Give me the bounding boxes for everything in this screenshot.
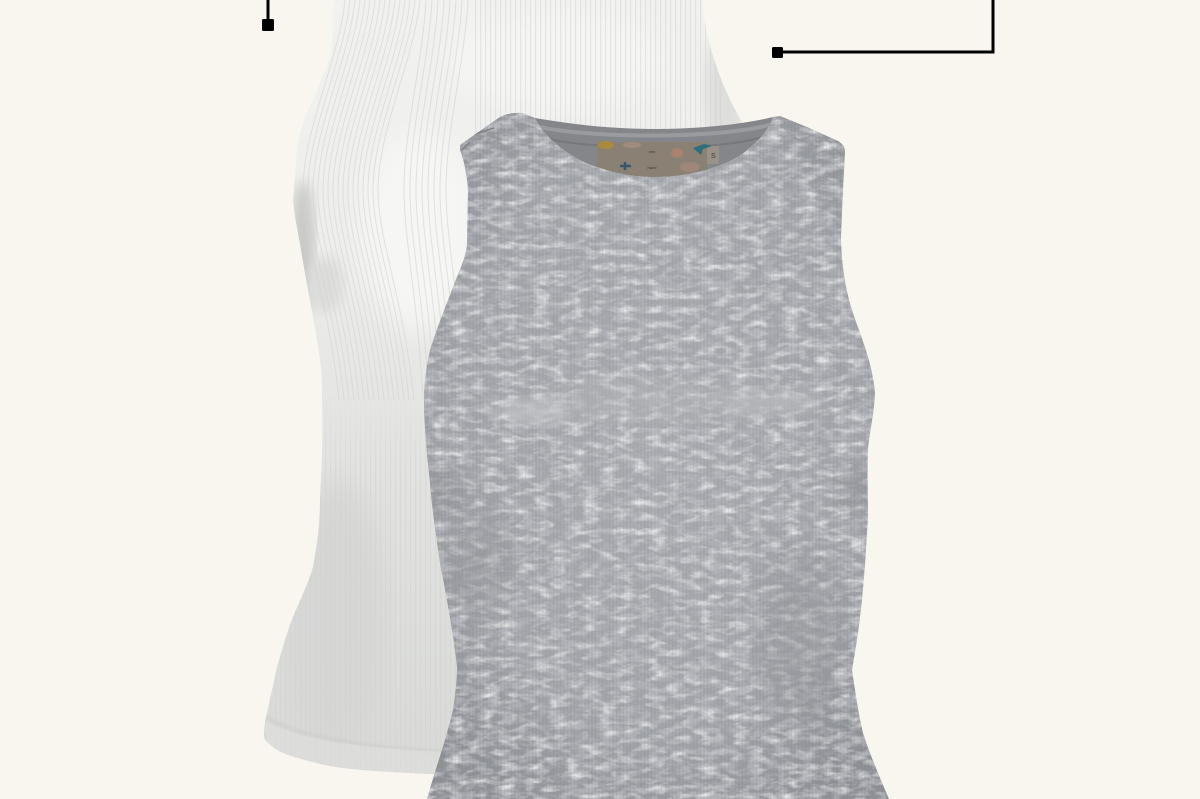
lower fine ribs: [325, 457, 431, 536]
neck label: S: [711, 153, 716, 160]
infographic canvas: [262, 0, 994, 799]
curved ribs: [303, 0, 468, 400]
hem band: [264, 717, 460, 778]
grey body fabric: [420, 105, 895, 799]
garment: grey heathered tank top: [420, 105, 895, 799]
neck interior with size label: [535, 117, 773, 177]
neck label: one: [649, 149, 656, 154]
connector: top right leader line with square end: [772, 0, 993, 58]
upper straight ribs: [475, 0, 725, 135]
neck label: hand: [648, 165, 656, 170]
neck label: [597, 141, 719, 178]
garment: white ribbed tank top: [250, 0, 760, 799]
shading on white top: [293, 49, 770, 632]
connector: top left leader line with square end: [262, 0, 274, 31]
